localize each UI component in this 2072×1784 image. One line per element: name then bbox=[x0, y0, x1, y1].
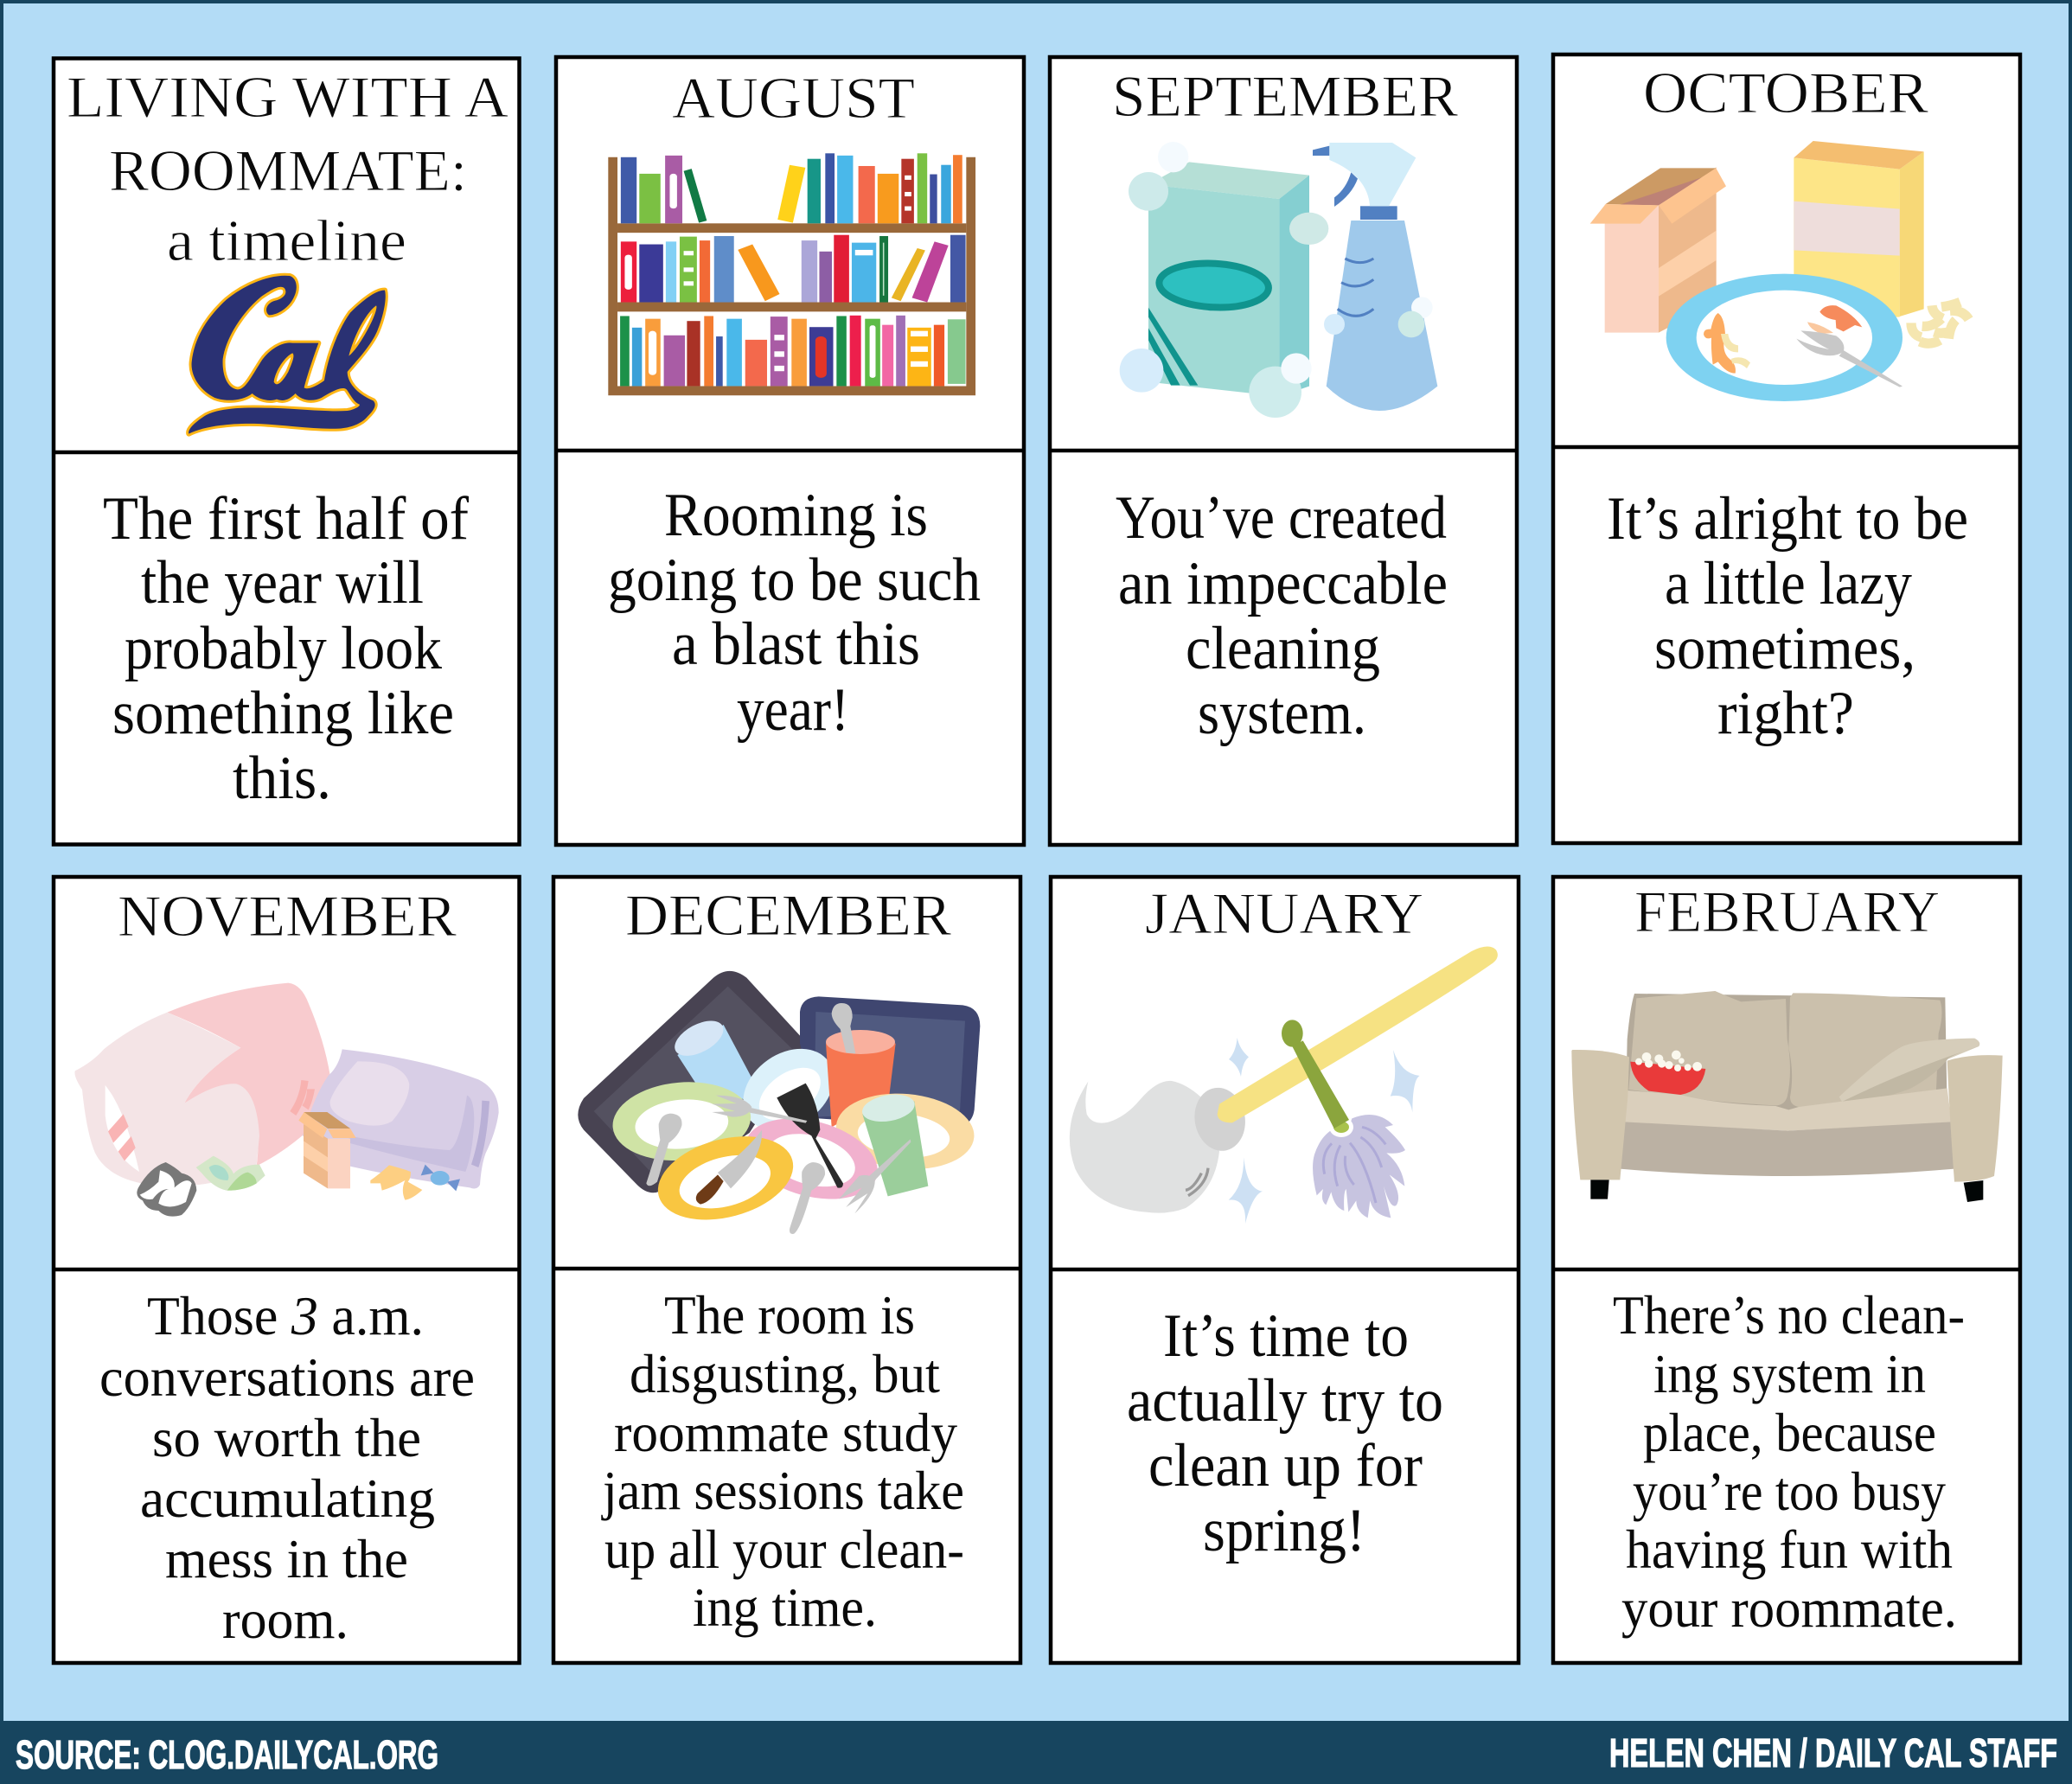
body text: right? bbox=[1717, 680, 1854, 747]
body text: you’re too busy bbox=[1633, 1461, 1946, 1522]
body text: a little lazy bbox=[1665, 550, 1912, 617]
panel: title card bbox=[54, 59, 519, 844]
body text: year! bbox=[737, 676, 849, 744]
body text: having fun with bbox=[1626, 1519, 1953, 1580]
card frame bbox=[556, 57, 1024, 845]
illustration: couch with popcorn bowl bbox=[1571, 991, 2003, 1202]
body text: an impeccable bbox=[1118, 550, 1448, 617]
body text: It’s time to bbox=[1163, 1302, 1409, 1370]
panel: January bbox=[1051, 877, 1519, 1663]
illustration: two mops and sparkles bbox=[1070, 947, 1498, 1224]
card frame bbox=[553, 877, 1020, 1663]
body text: roommate study bbox=[614, 1403, 957, 1463]
title heading: LIVING WITH A bbox=[67, 64, 508, 130]
body text: up all your clean- bbox=[604, 1519, 964, 1580]
body text: a blast this bbox=[672, 611, 920, 678]
body text: It’s alright to be bbox=[1607, 485, 1968, 553]
illustration: laundry bag, pillow and trash bbox=[74, 983, 499, 1217]
illustration: cereal boxes and dirty plate bbox=[1590, 141, 1969, 401]
body text: sometimes, bbox=[1654, 615, 1915, 682]
body text: actually try to bbox=[1127, 1367, 1443, 1435]
month heading: JANUARY bbox=[1145, 880, 1423, 946]
body text: There’s no clean- bbox=[1613, 1285, 1965, 1346]
subtitle: a timeline bbox=[167, 208, 406, 273]
month heading: DECEMBER bbox=[625, 882, 952, 948]
card frame bbox=[54, 59, 519, 844]
body text: clean up for bbox=[1148, 1432, 1423, 1499]
body text: ing time. bbox=[693, 1577, 877, 1638]
body text bbox=[1607, 485, 1968, 747]
card frame bbox=[1553, 877, 2020, 1663]
month heading: AUGUST bbox=[672, 65, 915, 131]
panel: August bbox=[556, 57, 1024, 845]
body text bbox=[1127, 1302, 1443, 1564]
body text: something like bbox=[112, 680, 454, 747]
body text bbox=[1116, 484, 1448, 747]
footer bar bbox=[0, 1721, 2072, 1784]
body text: probably look bbox=[125, 615, 442, 682]
month heading: NOVEMBER bbox=[118, 883, 457, 949]
body text bbox=[601, 1285, 964, 1638]
body text: ing system in bbox=[1653, 1344, 1926, 1404]
panel: September bbox=[1050, 57, 1517, 845]
body text: You’ve created bbox=[1116, 484, 1447, 552]
panel: November bbox=[54, 877, 519, 1663]
body text: accumulating bbox=[140, 1468, 435, 1529]
month heading: OCTOBER bbox=[1643, 60, 1929, 125]
body text: spring! bbox=[1203, 1497, 1365, 1564]
body text: place, because bbox=[1643, 1403, 1936, 1463]
panel: December bbox=[553, 877, 1020, 1663]
body text: disgusting, but bbox=[630, 1344, 940, 1404]
body text: conversations are bbox=[99, 1347, 475, 1408]
title heading line two: ROOMMATE: bbox=[109, 137, 467, 203]
icon: Cal script logo bbox=[189, 276, 386, 434]
card frame bbox=[1553, 54, 2020, 843]
body text: room. bbox=[222, 1589, 349, 1650]
illustration: pile of dirty dishes bbox=[578, 971, 980, 1234]
card frame bbox=[54, 877, 519, 1663]
body text: jam sessions take bbox=[601, 1461, 964, 1521]
body text: this. bbox=[233, 745, 331, 812]
body text bbox=[1613, 1285, 1965, 1639]
body text: Rooming is bbox=[664, 482, 928, 549]
body text: The first half of bbox=[103, 485, 469, 553]
month heading: SEPTEMBER bbox=[1112, 63, 1459, 129]
body text: cleaning bbox=[1186, 615, 1380, 682]
body text: system. bbox=[1198, 680, 1366, 747]
card frame bbox=[1051, 877, 1519, 1663]
body text bbox=[103, 485, 469, 812]
card frame bbox=[1050, 57, 1517, 845]
body text: the year will bbox=[141, 549, 424, 617]
body text: mess in the bbox=[165, 1529, 408, 1589]
illustration: detergent box and spray bottle bbox=[1120, 142, 1437, 418]
month heading: FEBRUARY bbox=[1634, 879, 1940, 944]
illustration: bookshelf bbox=[608, 153, 975, 395]
body text: so worth the bbox=[152, 1408, 421, 1468]
body text: Those 3 a.m. bbox=[147, 1286, 424, 1346]
body text: The room is bbox=[664, 1285, 915, 1346]
panel: October bbox=[1553, 54, 2020, 843]
body text: going to be such bbox=[608, 547, 981, 614]
body text bbox=[608, 482, 981, 744]
body text: your roommate. bbox=[1621, 1578, 1957, 1639]
source credit: SOURCE: CLOG.DAILYCAL.ORG bbox=[16, 1732, 438, 1777]
body text bbox=[99, 1286, 475, 1650]
panel: February bbox=[1553, 877, 2020, 1663]
